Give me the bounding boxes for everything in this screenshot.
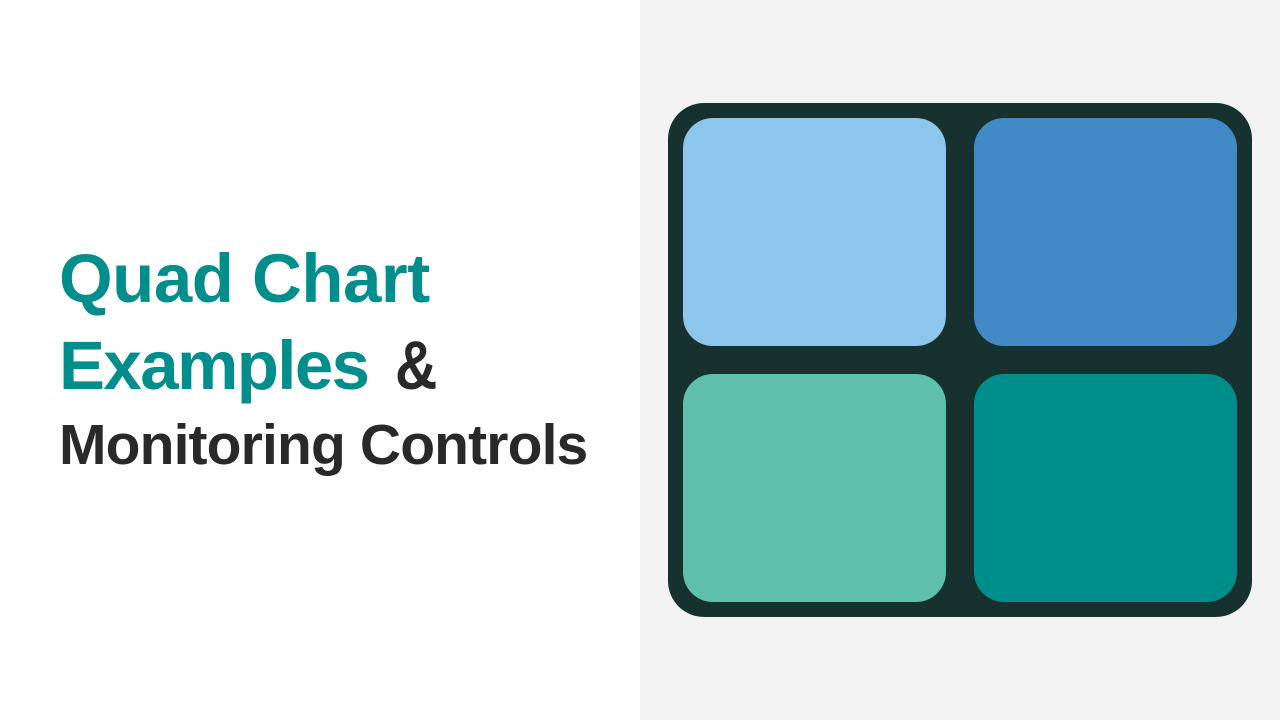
quadrant: bottom right bbox=[974, 374, 1237, 602]
quadrant: top right bbox=[974, 118, 1237, 346]
panel: right grey background bbox=[640, 0, 1280, 720]
title line: Examples: Examples bbox=[59, 327, 368, 404]
title line: Monitoring Controls: Monitoring Controls bbox=[59, 413, 587, 477]
panel: left white background bbox=[0, 0, 640, 720]
quadrant: top left bbox=[683, 118, 946, 346]
quadrant: bottom left bbox=[683, 374, 946, 602]
title bbox=[59, 240, 587, 477]
quad chart bbox=[668, 103, 1252, 617]
title ampersand: & bbox=[395, 327, 437, 404]
title line: Quad Chart: Quad Chart bbox=[59, 240, 430, 317]
